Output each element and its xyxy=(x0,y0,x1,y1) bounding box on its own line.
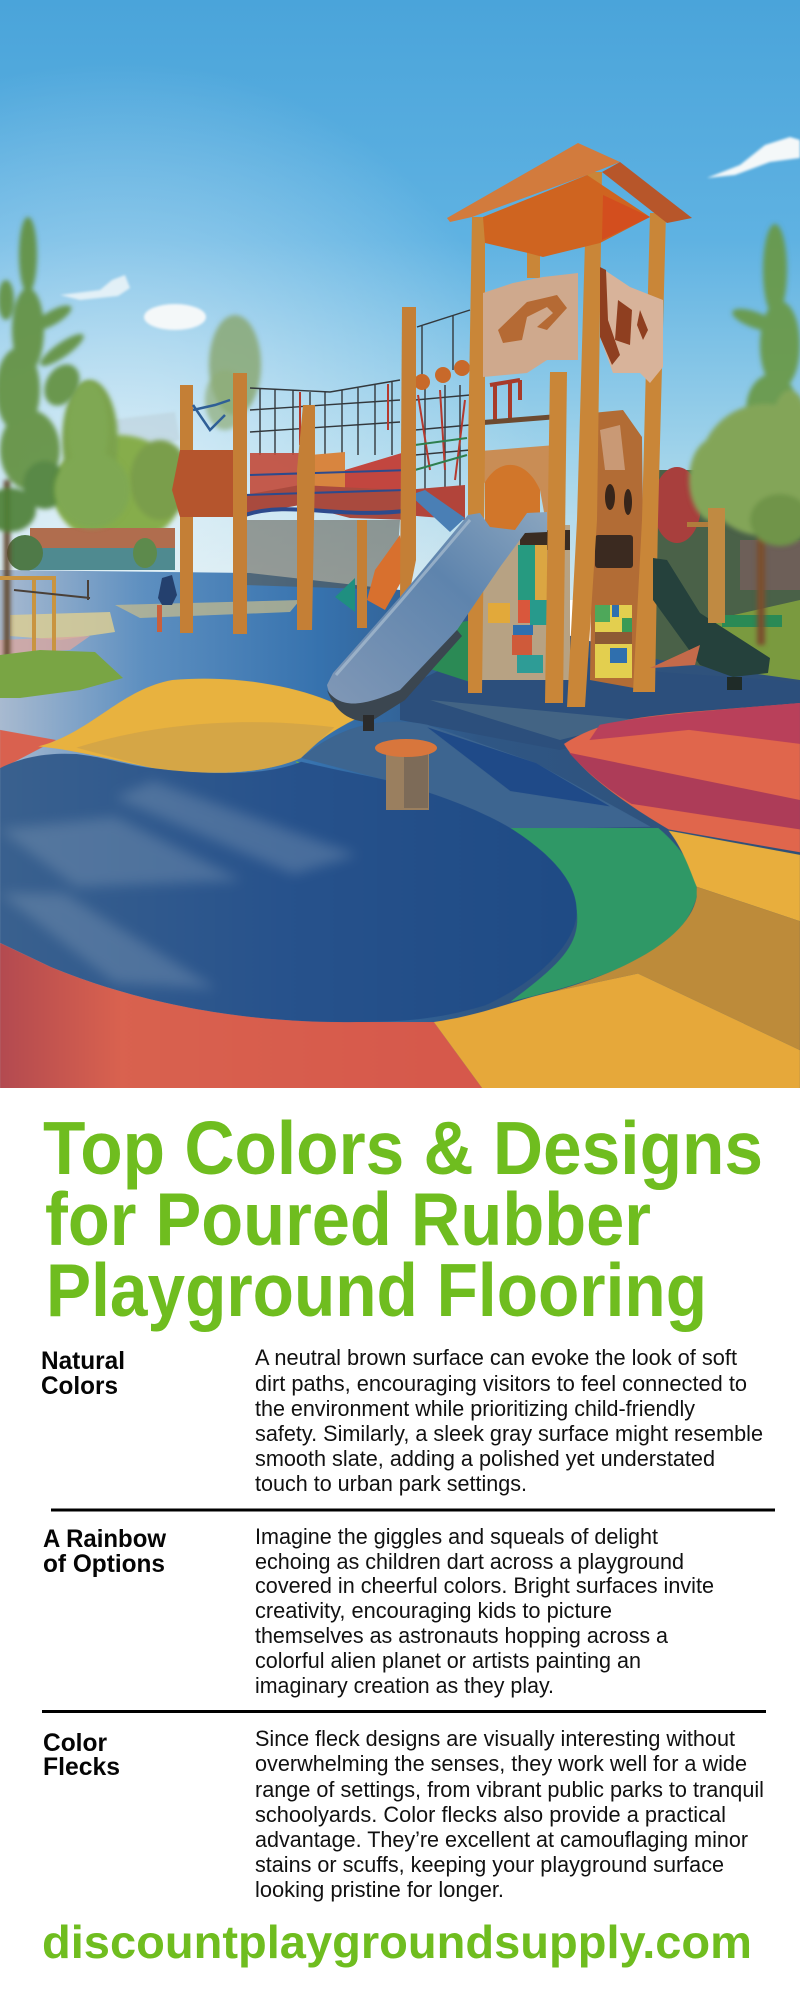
right tree xyxy=(689,224,800,645)
hero photo: playground with poured rubber surface xyxy=(0,0,800,1088)
shaded area under bridge xyxy=(245,520,400,590)
body text: color flecks: overwhelming the senses, they work well for a wide xyxy=(255,1751,747,1776)
body text: natural colors: touch to urban park settings. xyxy=(255,1471,527,1496)
dark blue surface around tower xyxy=(400,672,630,740)
right background: hedge, fence and red tree xyxy=(653,467,800,685)
distant buildings and fence xyxy=(7,528,175,571)
darker blue wedge xyxy=(427,727,610,806)
heading: color flecks xyxy=(43,1729,120,1781)
rust panel on left platform xyxy=(172,450,233,517)
body text: natural colors: the environment while prioritizing child-friendly xyxy=(255,1396,695,1421)
grass patch xyxy=(0,650,123,698)
body text: a rainbow of options: creativity, encouraging kids to picture xyxy=(255,1598,612,1623)
section: a rainbow of options xyxy=(43,1524,714,1698)
upper rope net xyxy=(250,310,470,490)
body text: color flecks: schoolyards. Color flecks also provide a practical xyxy=(255,1802,726,1827)
blue slide behind bridge xyxy=(416,490,465,532)
big blue surface xyxy=(0,754,577,1022)
bottom red surface xyxy=(0,943,482,1088)
left fence xyxy=(0,576,56,655)
body text: a rainbow of options: colorful alien planet or artists painting an xyxy=(255,1648,641,1673)
right slide foot xyxy=(727,677,742,690)
swing seat and rope xyxy=(14,580,90,600)
slide foot xyxy=(363,715,374,731)
left red surface xyxy=(0,730,56,769)
section: color flecks xyxy=(43,1726,764,1902)
right yellow surface xyxy=(669,831,800,921)
magenta shadow band xyxy=(569,753,800,829)
small green sliver xyxy=(296,761,300,764)
heading: natural colors: Natural xyxy=(41,1347,125,1375)
body text: a rainbow of options: covered in cheerful colors. Bright surfaces invite xyxy=(255,1573,714,1598)
title: Top Colors & Designs xyxy=(43,1106,763,1190)
tower wood posts xyxy=(468,172,709,707)
body text: color flecks: looking pristine for longer. xyxy=(255,1877,504,1902)
middle background tree xyxy=(54,382,130,528)
body text: color flecks xyxy=(255,1726,764,1902)
right dark green slide xyxy=(653,558,770,677)
light surface patches on far ground xyxy=(0,600,300,655)
green surface xyxy=(503,828,697,1002)
green lower panel xyxy=(427,620,472,682)
right panel carving xyxy=(600,267,648,365)
teal tube slide xyxy=(335,578,355,612)
sun streaks on blue xyxy=(0,781,357,989)
yellow surface xyxy=(38,679,360,773)
bottom gold surface xyxy=(434,974,800,1088)
body text: color flecks: Since fleck designs are visually interesting without xyxy=(255,1726,735,1751)
color block activity square xyxy=(595,605,632,678)
tower upper panel xyxy=(483,273,578,377)
left tree xyxy=(0,217,87,658)
body text: color flecks: stains or scuffs, keeping your playground surface xyxy=(255,1852,724,1877)
body text: a rainbow of options: echoing as children dart across a playground xyxy=(255,1549,684,1574)
heading: a rainbow of options xyxy=(43,1525,167,1578)
right wooden post in front of slide xyxy=(708,508,725,623)
heading: color flecks: Color xyxy=(43,1729,107,1757)
small red slide behind xyxy=(650,645,700,668)
right red surface xyxy=(564,703,800,852)
tower arch xyxy=(468,445,558,545)
colored block panels xyxy=(488,545,547,673)
child on playground xyxy=(157,575,177,632)
darker yellow shade band xyxy=(77,722,334,773)
panel carving xyxy=(498,295,567,343)
section: natural colors xyxy=(41,1345,763,1496)
body text: a rainbow of options: Imagine the giggles and squeals of delight xyxy=(255,1524,658,1549)
blue decorative rope knot xyxy=(193,400,230,430)
roof underside xyxy=(483,175,650,257)
body text: a rainbow of options xyxy=(255,1524,714,1698)
distant tree line xyxy=(53,315,261,545)
title xyxy=(43,1106,763,1332)
red and blue rope nets on right side xyxy=(415,390,467,480)
left platform and bridge posts xyxy=(180,307,416,634)
body text: natural colors xyxy=(255,1345,763,1496)
rope bridge xyxy=(245,452,465,520)
heading: a rainbow of options: of Options xyxy=(43,1550,165,1578)
website footer: discountplaygroundsupply.com xyxy=(42,1916,752,1968)
stool xyxy=(375,739,437,810)
orange tube slide xyxy=(367,535,405,610)
body text: a rainbow of options: imaginary creation as they play. xyxy=(255,1673,554,1698)
crimson top band xyxy=(589,703,800,744)
body text: color flecks: range of settings, from vibrant public parks to tranquil xyxy=(255,1777,764,1802)
playground ground surfaces xyxy=(0,679,800,1088)
heading: color flecks: Flecks xyxy=(43,1753,120,1781)
tower right carved panel xyxy=(600,267,663,383)
tower climbing panel xyxy=(590,410,645,690)
body text: natural colors: smooth slate, adding a polished yet understated xyxy=(255,1446,715,1471)
slide rim xyxy=(336,520,470,675)
clouds xyxy=(60,137,800,452)
body text: a rainbow of options: themselves as astronauts hopping across a xyxy=(255,1623,669,1648)
shaded blue centre band xyxy=(301,722,651,829)
under-panel red carving xyxy=(477,380,552,423)
title: Playground Flooring xyxy=(46,1248,707,1332)
body text: natural colors: A neutral brown surface can evoke the look of soft xyxy=(255,1345,737,1370)
body text: natural colors: safety. Similarly, a sleek gray surface might resemble xyxy=(255,1421,763,1446)
tower back structure xyxy=(470,460,570,680)
body text: natural colors: dirt paths, encouraging visitors to feel connected to xyxy=(255,1371,747,1396)
heading: a rainbow of options: A Rainbow xyxy=(43,1525,167,1553)
roof red inner panel xyxy=(602,195,650,240)
sky xyxy=(0,0,800,600)
title: for Poured Rubber xyxy=(45,1177,651,1261)
slide dark underside xyxy=(327,630,462,722)
brown-gold surface xyxy=(549,887,800,1050)
main blue slide xyxy=(327,512,547,709)
heading: natural colors: Colors xyxy=(41,1372,118,1400)
ground surface xyxy=(0,570,800,1088)
orange balls on rope xyxy=(414,360,470,390)
body text: color flecks: advantage. They’re excellent at camouflaging minor xyxy=(255,1827,748,1852)
roof top xyxy=(447,143,620,222)
roof right edge xyxy=(602,162,692,223)
heading: natural colors xyxy=(41,1347,125,1400)
